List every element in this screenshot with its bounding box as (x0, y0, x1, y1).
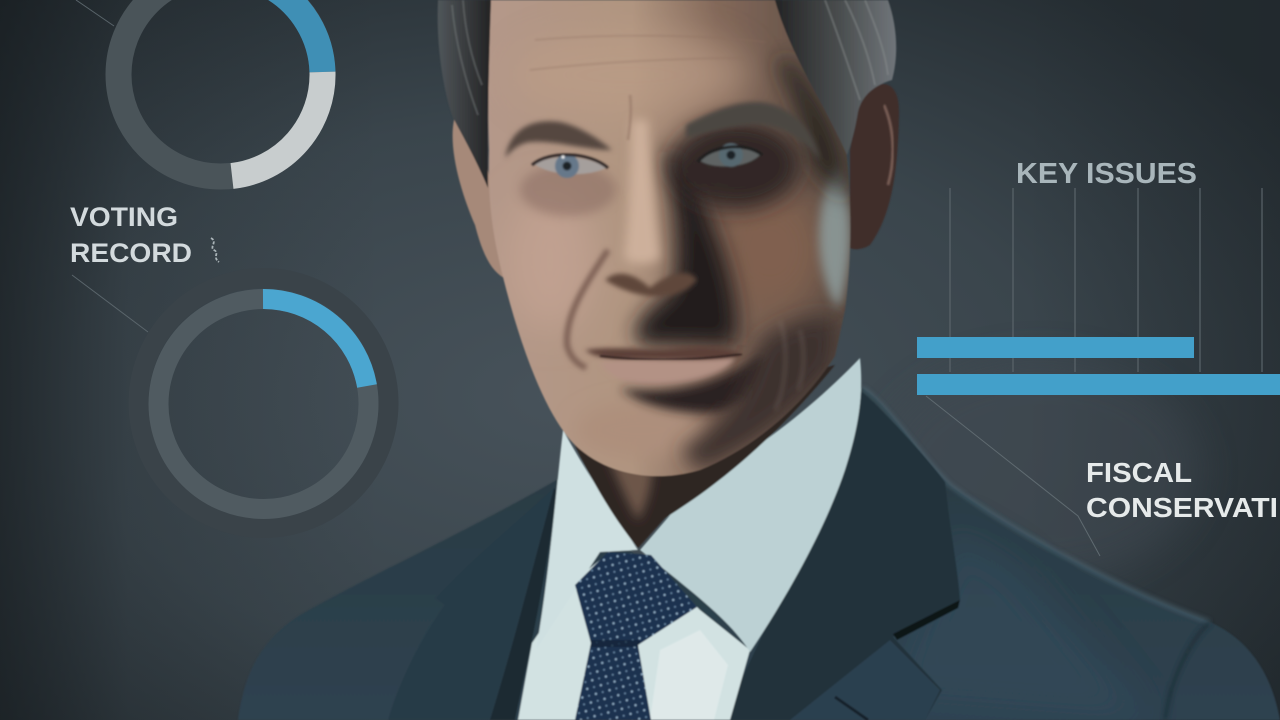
leader line: fiscal conservatism (926, 396, 1100, 556)
left brow (505, 121, 612, 158)
heading: voting record: VOTING (70, 202, 178, 232)
right lapel (722, 392, 960, 720)
jaw right shadow (680, 317, 838, 470)
chin light (652, 410, 707, 456)
right eye (698, 143, 762, 167)
left eye (532, 154, 608, 178)
heading: key issues: KEY ISSUES (1016, 158, 1197, 190)
nose cast shadow (635, 150, 737, 345)
suit jacket (238, 388, 1280, 720)
right face lines (775, 320, 804, 410)
leader line: top ring (76, 0, 114, 26)
left lapel (388, 488, 554, 720)
pocket slit (835, 697, 868, 720)
shirt (518, 358, 861, 720)
right eye socket shade (670, 120, 800, 210)
tie (574, 552, 698, 720)
heading: voting record: RECORD (70, 238, 192, 268)
label: fiscal conservatism: FISCAL (1086, 457, 1192, 488)
icon: small squiggle (211, 238, 219, 262)
label: fiscal conservatism (1086, 457, 1278, 523)
bar: lower (917, 374, 1280, 395)
pale rim light (819, 165, 850, 310)
skin base (480, 0, 860, 490)
ear: left (453, 120, 504, 278)
heading: voting record (70, 202, 192, 268)
under-lip shadow (620, 355, 768, 413)
face (480, 0, 860, 490)
nose base (605, 273, 697, 296)
nasolabial crease (567, 250, 608, 368)
hair: left (438, 0, 491, 188)
nose bridge light (624, 120, 660, 264)
lapel notch (893, 600, 960, 640)
leader line: lower ring (72, 275, 148, 332)
collar: left (536, 430, 638, 650)
mouth (585, 347, 742, 385)
right cheek (754, 193, 824, 310)
label: fiscal conservatism: CONSERVATI (1086, 492, 1278, 523)
right brow (686, 102, 820, 160)
forehead light (634, 26, 762, 123)
ear: right (850, 84, 899, 249)
left eye socket shade (520, 164, 616, 216)
donut chart: lower ring (138, 278, 388, 528)
chart: key issues bars (917, 158, 1280, 395)
donut chart: top ring (118, 0, 323, 176)
hair shadow on temple (775, 60, 846, 200)
left cheek light (514, 212, 592, 320)
hair: right (775, 0, 896, 155)
neck (563, 365, 835, 548)
forehead wrinkles (532, 35, 669, 140)
bar: upper (917, 337, 1194, 358)
collar: right (640, 358, 861, 652)
